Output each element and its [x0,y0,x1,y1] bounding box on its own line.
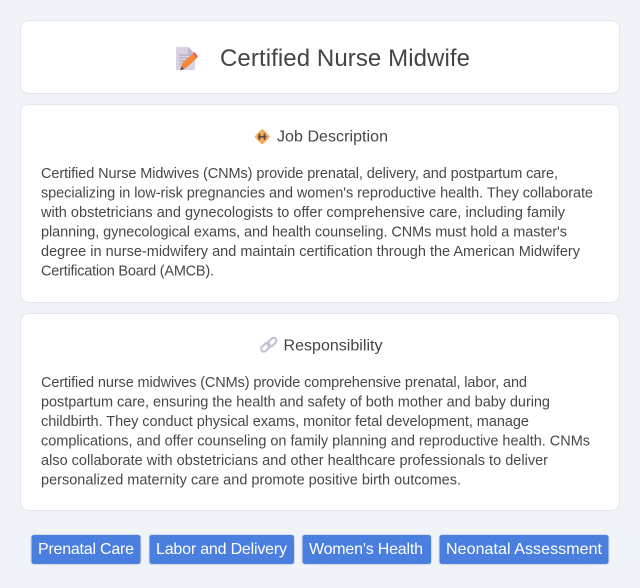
text block: responsibility [41,375,590,488]
text block: responsibility: complications, and offer counseling on family planning and reproductive health. CNMs [41,433,590,449]
icon: document with pencil [176,47,198,70]
text block: responsibility: childbirth. They conduct physical exams, monitor fetal development, manage [41,414,529,430]
icon: link [260,337,277,353]
tag: prenatal care [31,534,141,564]
icon: orange diamond [254,129,270,145]
text block: responsibility: also collaborate with obstetricians and other healthcare professionals to deliver [41,453,548,469]
text block: job description: with obstetricians and gynecologists to offer comprehensive care, including family [40,205,566,221]
tag: neonatal assessment: Neonatal Assessment [446,541,603,558]
panel: title card [20,20,620,94]
heading: job description: Job Description [277,128,388,146]
text block: job description [40,166,593,279]
text block: job description: specializing in low-risk pregnancies and women's reproductive health. They collaborate [41,185,593,201]
text block: job description: degree in nurse-midwifery and maintain certification through the American Midwifery [41,244,581,260]
text block: job description: Certified Nurse Midwives (CNMs) provide prenatal, delivery, and postpartum care, [41,166,558,182]
text block: job description: Certification Board (AMCB). [41,263,214,279]
panel: job description [20,104,620,302]
tag: labor and delivery: Labor and Delivery [156,541,287,558]
panel: responsibility [20,314,620,510]
tag: neonatal assessment [439,534,609,564]
tag: women's health: Women's Health [309,541,423,558]
heading: responsibility: Responsibility [284,338,382,354]
title: Certified Nurse Midwife [220,45,470,72]
text block: job description: planning, gynecological exams, and health counseling. CNMs must hold a master's [41,224,567,240]
tag: labor and delivery [149,534,294,564]
tag: prenatal care: Prenatal Care [38,541,134,558]
text block: responsibility: Certified nurse midwives (CNMs) provide comprehensive prenatal, labor, and [41,375,527,391]
tag: women's health [302,534,432,564]
text block: responsibility: personalized maternity care and promote positive birth outcomes. [41,472,461,488]
text block: responsibility: postpartum care, ensuring the health and safety of both mother and baby during [41,394,550,410]
